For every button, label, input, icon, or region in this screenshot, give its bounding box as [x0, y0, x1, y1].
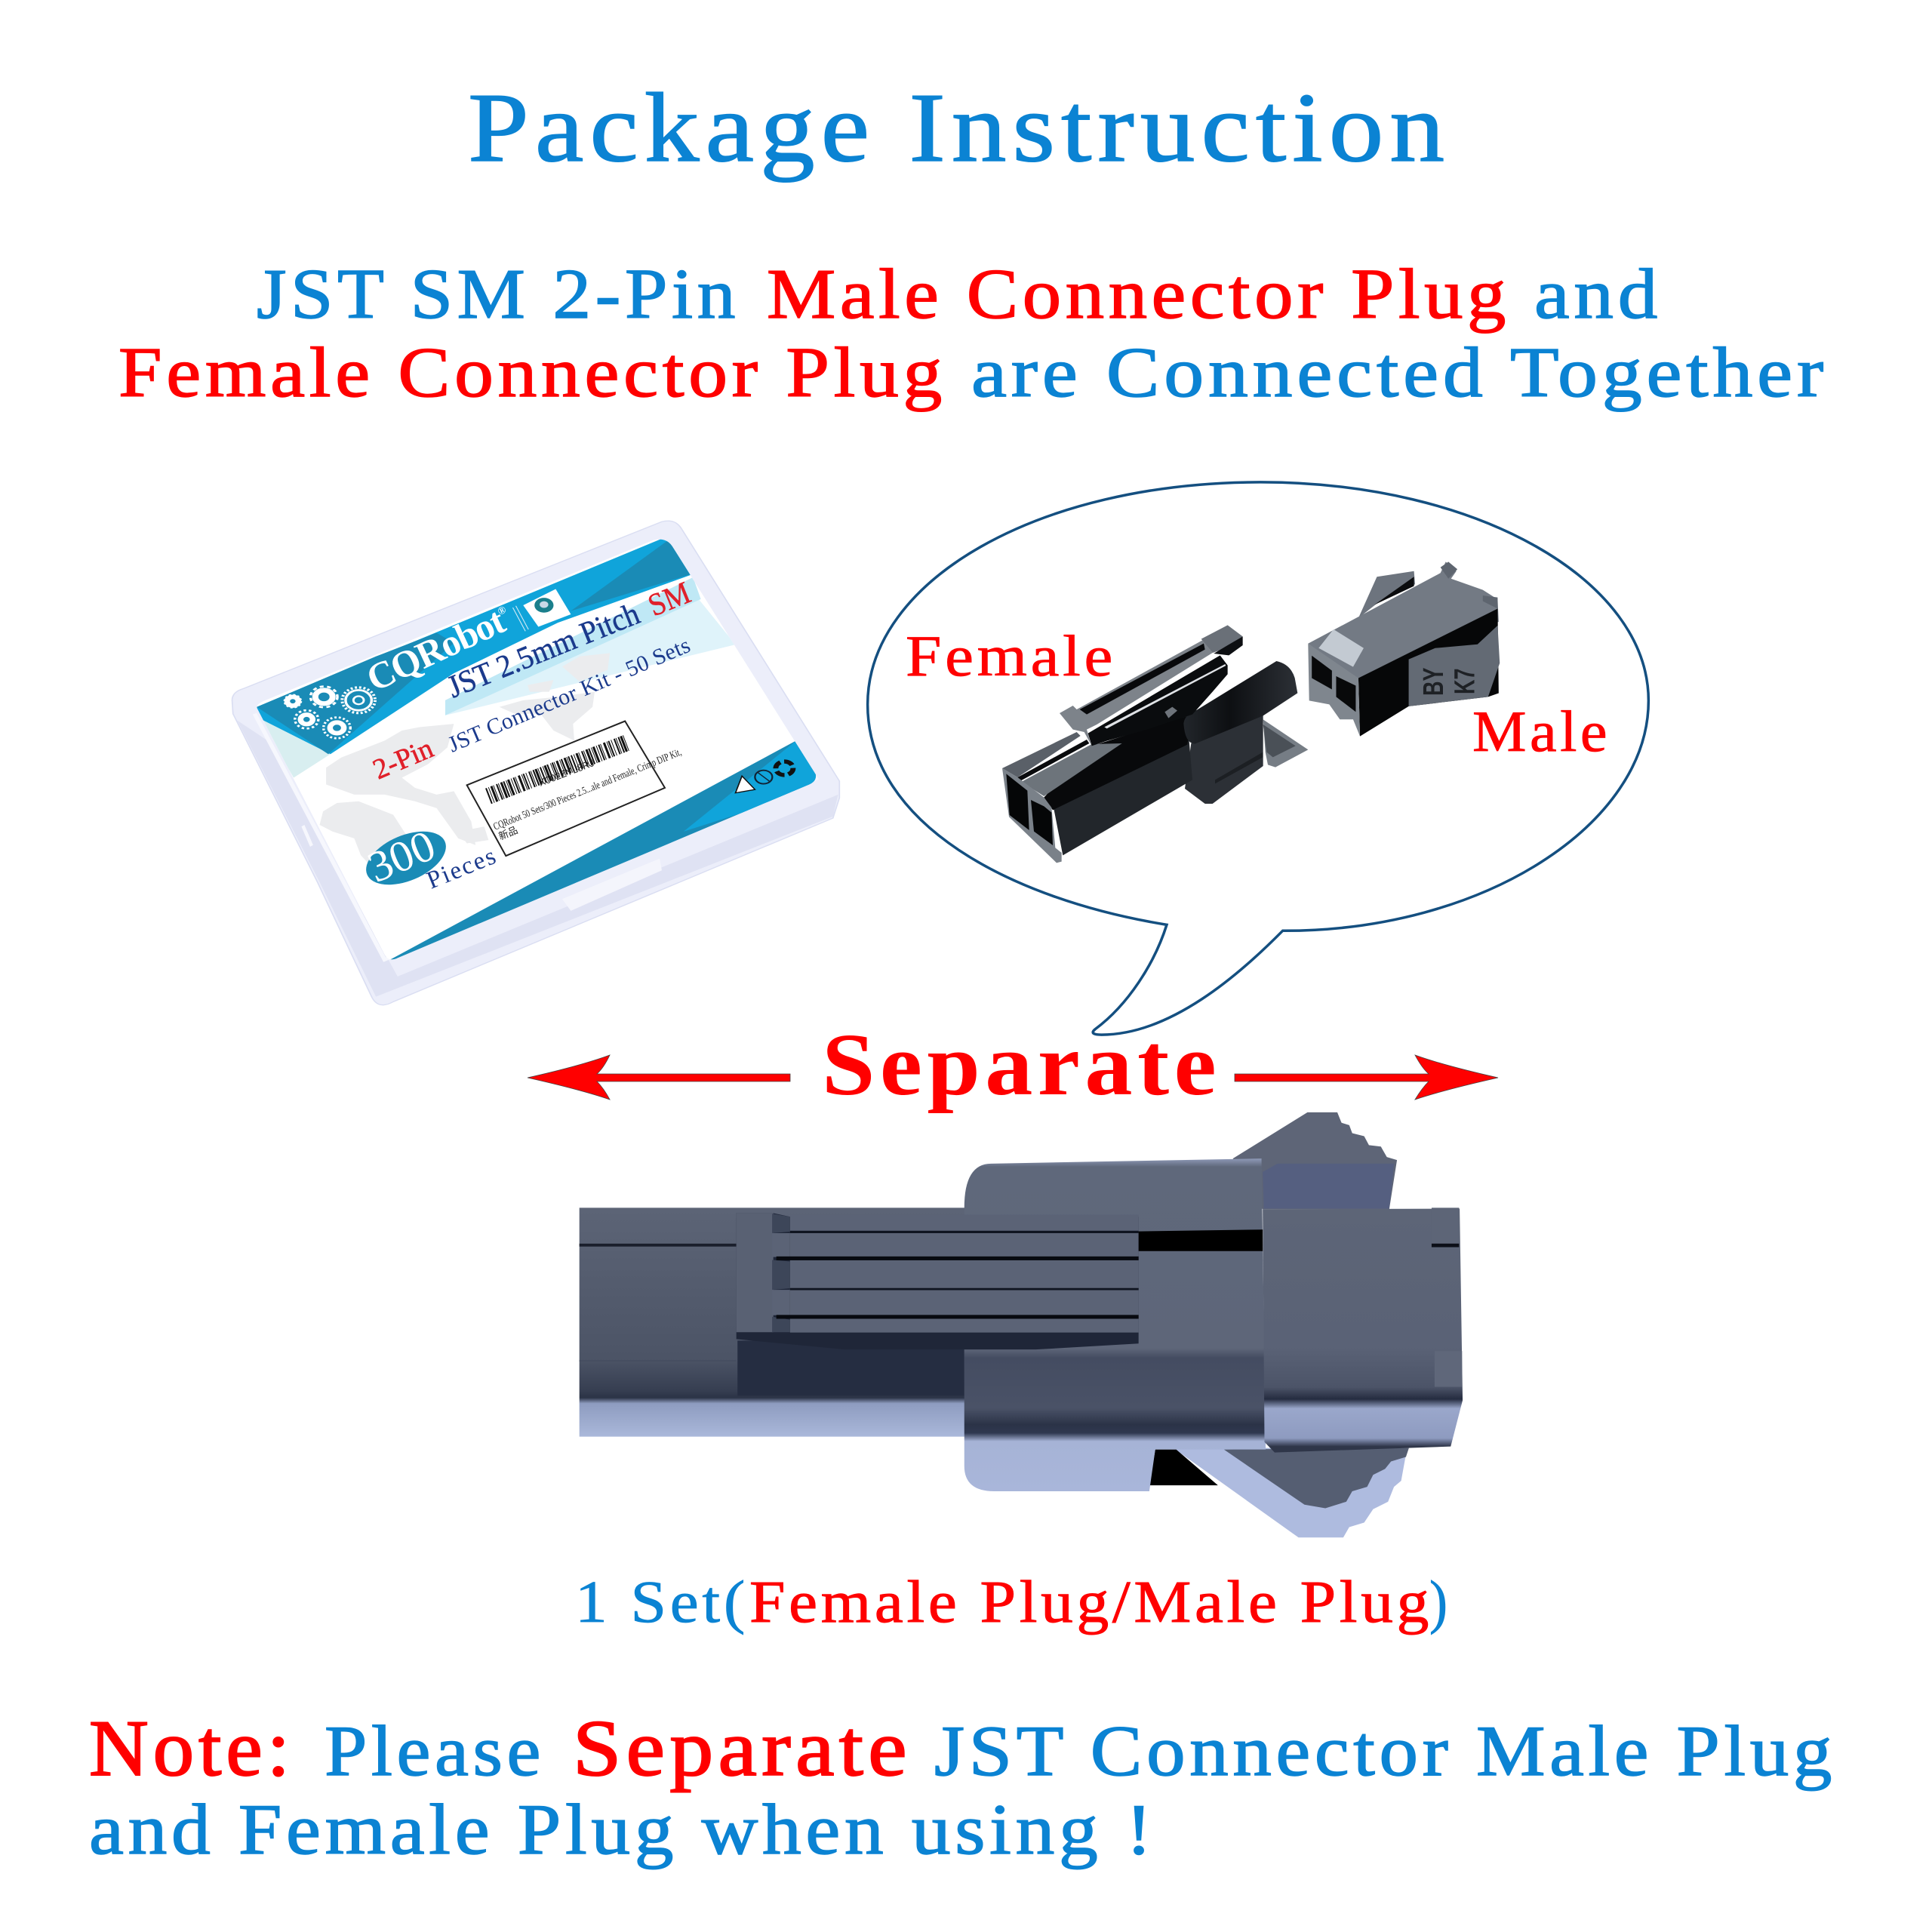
box texts: ® [496, 605, 509, 618]
male connector [1308, 561, 1500, 737]
right arrow [1235, 1055, 1498, 1100]
note: Separate [573, 1704, 912, 1792]
box texts [358, 576, 696, 895]
box texts: JST Connector Kit - 50 Sets [445, 632, 694, 757]
box texts: Pieces [423, 842, 500, 894]
caption: ) [1429, 1570, 1451, 1635]
box texts: X002ZYL8RJ [537, 757, 595, 789]
title: Package Instruction [468, 73, 1451, 183]
speech bubble [868, 482, 1648, 1035]
sleeve [964, 1158, 1266, 1491]
world map watermark [320, 653, 610, 867]
top latch [1233, 1112, 1397, 1209]
product box [232, 521, 844, 1005]
box texts: SM [644, 576, 696, 623]
subtitle: and [1534, 255, 1662, 334]
female body [580, 1208, 974, 1437]
box texts: 新品 [496, 822, 520, 843]
gears icon [285, 687, 375, 738]
warning icons [736, 761, 793, 793]
caption: 1 Set( [575, 1570, 749, 1635]
label: male: Male [1472, 699, 1611, 764]
caption: Female Plug/Male Plug [749, 1570, 1432, 1635]
male connector: BY [1417, 668, 1449, 696]
subtitle [118, 255, 1828, 412]
bottom latch [1149, 1448, 1409, 1537]
latch bar [737, 1213, 1263, 1349]
box texts: 2-Pin [368, 732, 438, 786]
note: Note: [89, 1704, 294, 1792]
subtitle: Male Connector Plug [767, 255, 1510, 334]
robot logo [513, 589, 571, 631]
female connector [1002, 625, 1308, 863]
note: JST Connector Male Plug [934, 1711, 1836, 1791]
box texts: 300 [361, 820, 442, 892]
subtitle: are Connected Together [971, 334, 1828, 412]
left arrow [528, 1055, 790, 1100]
subtitle: Female Connector Plug [118, 334, 946, 412]
male body [1263, 1209, 1463, 1453]
barcode bars [488, 743, 627, 796]
note: Please [325, 1711, 545, 1791]
barcode sticker [467, 721, 665, 856]
male connector: K7 [1448, 669, 1481, 694]
note: and Female Plug when using ! [89, 1789, 1156, 1869]
subtitle: JST SM 2-Pin [257, 255, 740, 334]
note [89, 1704, 1836, 1869]
box texts: CQRobot 50 Sets/300 Pieces 2.5...ale and Female, Crimp DIP Kit, [491, 746, 683, 832]
separate heading: Separate [822, 1015, 1221, 1114]
label: female: Female [906, 623, 1116, 688]
box texts: CQRobot [360, 599, 512, 700]
large assembled connector [580, 1112, 1463, 1537]
box texts: JST 2.5mm Pitch [443, 596, 645, 705]
